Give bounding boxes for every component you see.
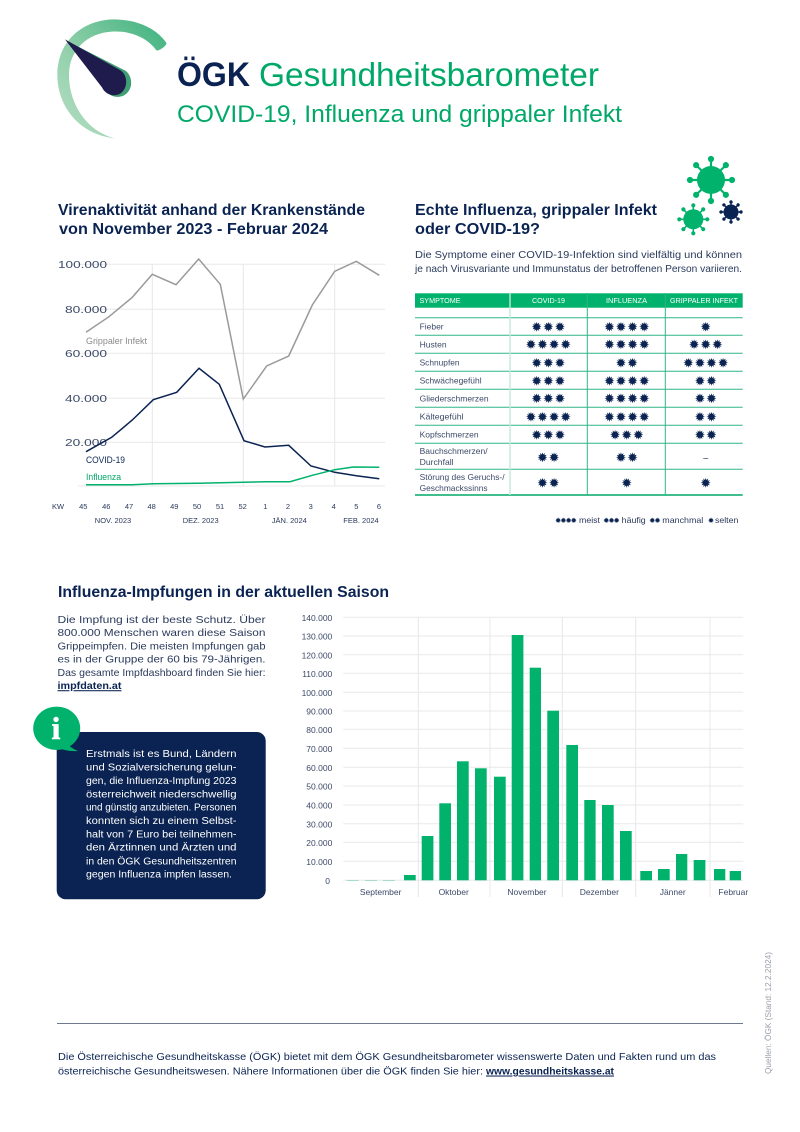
y axis labels: 0 — [325, 876, 330, 886]
table grid — [415, 293, 743, 495]
row: Störung des Geruchs: ✹✹ — [537, 476, 560, 492]
text: Impfung: Das gesamte Impfdashboard finden Sie hier: — [58, 667, 266, 679]
table legend: ✹✹ — [649, 516, 661, 525]
text: Symptome intro: je nach Virusvariante und Immunstatus der betroffenen Person variieren. — [414, 263, 742, 275]
row: Bauchschmerzen: Bauchschmerzen/ — [420, 446, 488, 456]
y axis labels: 130.000 — [302, 632, 333, 642]
y axis labels: 110.000 — [302, 669, 333, 679]
icon: navy virus — [720, 201, 742, 223]
icon: small green virus — [678, 204, 709, 235]
table legend — [555, 515, 739, 525]
y axis labels: 120.000 — [302, 650, 333, 660]
y axis labels — [58, 259, 107, 449]
callout text: Erstmals ist es Bund, Ländern — [86, 749, 236, 760]
callout text: konnten sich zu einem Selbst- — [86, 816, 236, 827]
row: Gliederschmerzen: ✹✹✹ — [531, 392, 565, 407]
y axis labels: 40.000 — [306, 801, 333, 811]
heading: Echte Influenza: oder COVID-19? — [415, 221, 540, 238]
y axis labels: 100.000 — [302, 688, 333, 698]
series label: Influenza: Influenza — [86, 472, 121, 482]
title: Gesundheitsbarometer — [259, 56, 599, 93]
row: Schnupfen: Schnupfen — [420, 358, 460, 368]
x axis months: Dezember — [580, 887, 619, 897]
row: Bauchschmerzen: ✹✹ — [616, 451, 638, 466]
text: Impfung: Grippeimpfen. Die meisten Impfungen gab — [58, 640, 266, 652]
callout text: gen, die Influenza-Impfung 2023 — [86, 776, 237, 787]
y axis labels: 60.000 — [306, 763, 333, 773]
icon: large green virus — [688, 157, 734, 203]
x axis weeks: 49 — [170, 502, 178, 511]
line: Influenza — [86, 467, 379, 485]
row: Störung des Geruchs: ✹ — [700, 476, 711, 492]
x axis weeks: 3 — [309, 502, 313, 511]
line: Grippaler Infekt — [86, 259, 379, 399]
row: Schwächegefühl: ✹✹✹✹ — [604, 375, 650, 390]
bars — [347, 635, 741, 881]
row: Husten — [420, 338, 723, 353]
x axis months: Oktober — [439, 887, 469, 897]
table legend: meist — [579, 515, 601, 525]
series label: COVID-19: COVID-19 — [86, 455, 125, 465]
row: Fieber: ✹ — [700, 320, 711, 336]
footer text — [58, 1051, 716, 1078]
row: Husten: ✹✹✹✹ — [604, 338, 650, 353]
y axis labels: 40.000 — [65, 393, 107, 405]
row: Schnupfen — [420, 357, 729, 372]
title: ÖGK — [177, 56, 250, 94]
row: Husten: ✹✹✹✹ — [525, 338, 571, 353]
x axis weeks: 47 — [125, 502, 133, 511]
row: Kopfschmerzen: ✹✹ — [694, 429, 717, 444]
row: Störung des Geruchs — [420, 472, 711, 493]
row: Störung des Geruchs: Geschmackssinns — [420, 483, 488, 493]
x axis months: JÄN. 2024 — [272, 516, 307, 525]
row: Kältegefühl: Kältegefühl — [420, 412, 464, 422]
line: COVID-19 — [86, 368, 379, 479]
icon: info bubble — [33, 707, 80, 751]
row: Kopfschmerzen: ✹✹✹ — [531, 429, 565, 444]
table header: COVID-19 — [532, 298, 565, 305]
callout text: und günstig anzubieten. Personen — [86, 803, 236, 814]
y axis labels: 100.000 — [58, 259, 107, 271]
y axis labels: 140.000 — [302, 613, 333, 623]
row: Fieber: ✹✹✹ — [531, 320, 565, 336]
text: Symptome intro — [414, 249, 742, 275]
table legend: selten — [715, 515, 739, 525]
logo: gauge icon — [57, 19, 167, 138]
row: Fieber: Fieber — [420, 322, 444, 332]
heading: Influenza-Impfungen: Influenza-Impfungen in der aktuellen Saison — [58, 584, 389, 601]
row: Schwächegefühl — [420, 375, 717, 390]
source note: Quellen: ÖGK (Stand: 12.2.2024) — [764, 952, 773, 1074]
row: Fieber: ✹✹✹✹ — [604, 320, 650, 336]
table legend: ✹ — [708, 516, 714, 525]
x axis weeks: 4 — [332, 502, 336, 511]
y axis labels: 60.000 — [65, 348, 107, 360]
row: Fieber — [420, 320, 711, 336]
row: Schwächegefühl: ✹✹✹ — [531, 375, 565, 390]
row: Kältegefühl: ✹✹ — [694, 411, 717, 426]
row: Schnupfen: ✹✹✹✹ — [683, 357, 729, 372]
y axis labels: 20.000 — [306, 838, 333, 848]
x axis weeks: 45 — [79, 502, 87, 511]
row: Schnupfen: ✹✹ — [615, 357, 638, 372]
heading: Echte Influenza — [415, 202, 658, 238]
x axis months: Februar — [718, 887, 748, 897]
y axis labels: 80.000 — [65, 304, 107, 316]
table header: SYMPTOME — [420, 298, 461, 305]
x axis weeks: 2 — [286, 502, 290, 511]
bar chart: Influenza-Impfungen — [302, 613, 748, 897]
row: Bauchschmerzen: Durchfall — [420, 457, 454, 467]
callout text: den Ärztinnen und Ärzten und — [86, 842, 236, 854]
row: Gliederschmerzen: ✹✹ — [694, 392, 717, 407]
row: Kältegefühl: ✹✹✹✹ — [604, 411, 650, 426]
heading: Virenaktivität: von November 2023 - Februar 2024 — [59, 221, 328, 238]
callout text: in den ÖGK Gesundheitszentren — [86, 855, 236, 867]
row: Störung des Geruchs: ✹ — [621, 476, 632, 492]
row: Gliederschmerzen: Gliederschmerzen — [420, 394, 489, 404]
x axis months — [360, 887, 748, 897]
x axis weeks: 52 — [239, 502, 247, 511]
series label: Grippaler Infekt: Grippaler Infekt — [86, 336, 147, 346]
heading: Echte Influenza: Echte Influenza, grippaler Infekt — [415, 202, 658, 219]
row: Kältegefühl: ✹✹✹✹ — [525, 411, 571, 426]
row: Kopfschmerzen — [420, 429, 717, 444]
footer text: Die Österreichische Gesundheitskasse (ÖGK) bietet mit dem ÖGK Gesundheitsbarometer wissenswerte Daten und Fakten rund um das — [58, 1051, 716, 1063]
row: Kopfschmerzen: Kopfschmerzen — [420, 430, 479, 440]
table legend: ✹✹✹ — [603, 516, 620, 525]
callout text — [86, 749, 237, 881]
row: Schwächegefühl: ✹✹ — [694, 375, 717, 390]
text: Symptome intro: Die Symptome einer COVID-19-Infektion sind vielfältig und können — [415, 249, 742, 261]
y axis labels: 70.000 — [306, 744, 333, 754]
x axis weeks: 51 — [216, 502, 224, 511]
row: Schnupfen: ✹✹✹ — [531, 357, 565, 372]
x axis months: NOV. 2023 — [95, 516, 131, 525]
text: Impfung — [58, 614, 266, 692]
symptom table — [415, 293, 743, 495]
table header — [415, 293, 743, 308]
row: Bauchschmerzen: ✹✹ — [537, 451, 560, 466]
table header: GRIPPALER INFEKT — [670, 298, 739, 305]
heading: Virenaktivität — [58, 202, 365, 238]
subtitle: COVID-19, Influenza und grippaler Infekt — [177, 101, 622, 128]
icon: info bubble: i — [52, 710, 61, 746]
heading: Virenaktivität: Virenaktivität anhand der Krankenstände — [58, 202, 365, 219]
text: Impfung: impfdaten.at — [58, 680, 122, 692]
callout text: österreichweit niederschwellig — [86, 789, 236, 800]
x axis weeks: 1 — [263, 502, 267, 511]
x axis weeks: KW — [52, 502, 65, 511]
row: Kältegefühl — [420, 411, 717, 426]
y axis labels: 90.000 — [306, 707, 333, 717]
y axis labels: 50.000 — [306, 782, 333, 792]
y axis labels: 30.000 — [306, 819, 333, 829]
row: Bauchschmerzen — [420, 446, 708, 467]
line chart: Virenaktivität — [52, 259, 385, 525]
table legend: ✹✹✹✹ — [555, 516, 577, 525]
footer text: österreichische Gesundheitswesen. Nähere Informationen über die ÖGK finden Sie hier: — [58, 1066, 483, 1078]
icon: viruses — [678, 157, 742, 235]
x axis weeks: 6 — [377, 502, 381, 511]
y axis labels: 20.000 — [65, 437, 107, 449]
row: Husten: Husten — [420, 340, 447, 350]
table header: INFLUENZA — [606, 298, 647, 305]
x axis months: FEB. 2024 — [343, 516, 379, 525]
callout text: gegen Influenza impfen lassen. — [86, 870, 232, 881]
text: Impfung: Die Impfung ist der beste Schutz. Über — [58, 614, 266, 626]
callout: info box — [33, 707, 266, 899]
callout text: halt von 7 Euro bei teilnehmen- — [86, 829, 237, 840]
footer text: www.gesundheitskasse.at — [485, 1066, 614, 1078]
text: Impfung: es in der Gruppe der 60 bis 79-Jährigen. — [58, 654, 266, 666]
table legend: häufig — [622, 515, 646, 525]
y axis labels — [302, 613, 333, 886]
callout text: und Sozialversicherung gelun- — [86, 762, 236, 774]
table legend: manchmal — [662, 515, 703, 525]
row: Gliederschmerzen: ✹✹✹✹ — [604, 392, 650, 407]
y axis labels: 10.000 — [306, 857, 333, 867]
x axis months: Jänner — [660, 887, 686, 897]
x axis months: DEZ. 2023 — [183, 516, 219, 525]
x axis weeks: 5 — [354, 502, 358, 511]
row: Gliederschmerzen — [420, 392, 717, 407]
x axis months — [95, 516, 379, 525]
x axis weeks: 48 — [148, 502, 156, 511]
row: Husten: ✹✹✹ — [689, 338, 723, 353]
footer divider — [57, 1022, 743, 1024]
x axis weeks: 50 — [193, 502, 201, 511]
row: Kopfschmerzen: ✹✹✹ — [610, 429, 644, 444]
row: Schwächegefühl: Schwächegefühl — [420, 376, 482, 386]
x axis weeks — [52, 502, 381, 511]
row: Störung des Geruchs: Störung des Geruchs-/ — [420, 472, 505, 482]
text: Impfung: 800.000 Menschen waren diese Saison — [58, 627, 266, 639]
x axis weeks: 46 — [102, 502, 110, 511]
x axis months: November — [507, 887, 547, 897]
row: Bauchschmerzen: – — [703, 452, 708, 462]
y axis labels: 80.000 — [306, 725, 333, 735]
x axis months: September — [360, 887, 402, 897]
